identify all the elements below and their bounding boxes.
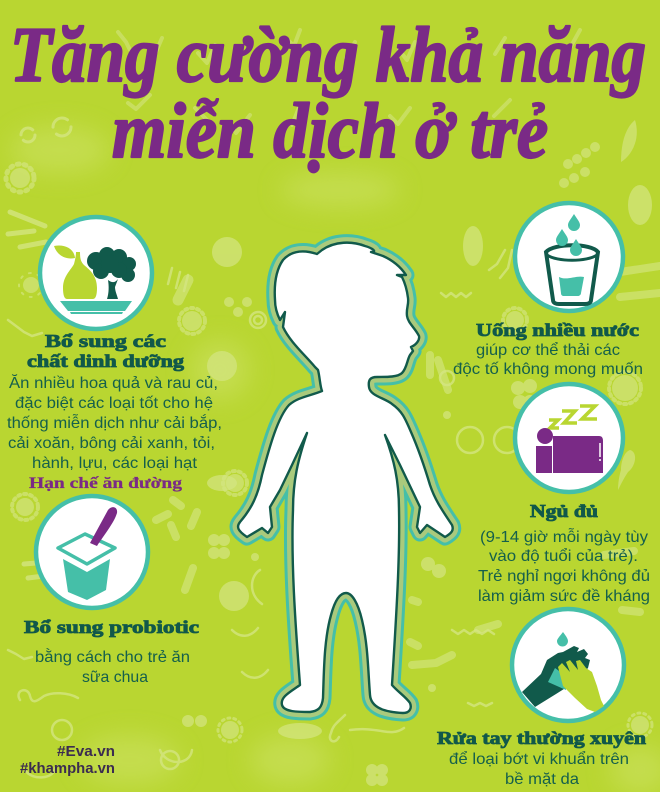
hashtags <box>20 743 115 777</box>
text: nutrition: Hạn chế ăn đường <box>29 475 182 492</box>
text: nutrition: Ăn nhiều hoa quả và rau củ, <box>9 373 218 392</box>
heading: nutrition <box>27 331 184 371</box>
text: water: độc tố không mong muốn <box>453 361 643 378</box>
hashtags: #Eva.vn <box>57 743 115 760</box>
assorted spiky balls <box>6 164 652 742</box>
text: nutrition: cải xoăn, bông cải xanh, tỏi, <box>8 435 215 452</box>
icon: washing hands <box>512 609 624 721</box>
icon: pear and broccoli <box>40 217 152 329</box>
title <box>10 11 646 174</box>
icon: water glass <box>515 203 623 311</box>
icon: sleeping <box>515 384 623 492</box>
text: sleep: làm giảm sức đề kháng <box>478 588 650 605</box>
heading: nutrition: chất dinh dưỡng <box>27 351 184 371</box>
child silhouette <box>238 243 453 713</box>
heading: nutrition: Bổ sung các <box>45 331 166 351</box>
icon: yogurt <box>36 496 148 608</box>
text: sleep <box>478 527 650 605</box>
squiggles and tails <box>8 212 520 777</box>
text: nutrition: đặc biệt các loại tốt cho hệ <box>15 395 213 412</box>
text: probiotic <box>35 647 190 686</box>
text: water <box>453 341 643 378</box>
top Y shapes <box>118 30 580 133</box>
text: nutrition: hành, lựu, các loại hạt <box>32 455 198 472</box>
heading: sleep: Ngủ đủ <box>530 501 598 521</box>
text: hand washing: bề mặt da <box>505 771 579 788</box>
heading: hand washing: Rửa tay thường xuyên <box>437 728 646 748</box>
blobs and circle clusters <box>182 185 652 786</box>
text: probiotic: bằng cách cho trẻ ăn <box>35 647 190 666</box>
left rings and right chain <box>21 118 71 142</box>
text: probiotic: sữa chua <box>82 669 148 686</box>
text: hand washing <box>449 750 629 788</box>
text: nutrition: thống miễn dịch như cải bắp, <box>7 413 222 432</box>
text: nutrition <box>7 373 222 492</box>
rods and bacilli <box>156 266 660 665</box>
text: sleep: Trẻ nghỉ ngơi không đủ <box>478 568 650 585</box>
text: sleep: (9-14 giờ mỗi ngày tùy <box>480 527 648 546</box>
heading: water: Uống nhiều nước <box>476 320 639 340</box>
text: sleep: vào độ tuổi của trẻ). <box>489 547 638 565</box>
text: hand washing: để loại bớt vi khuẩn trên <box>449 750 629 768</box>
hashtags: #khampha.vn <box>20 760 115 777</box>
text: water: giúp cơ thể thải các <box>476 341 620 359</box>
heading: probiotic: Bổ sung probiotic <box>24 617 199 637</box>
title: miễn dịch ở trẻ <box>112 87 548 174</box>
